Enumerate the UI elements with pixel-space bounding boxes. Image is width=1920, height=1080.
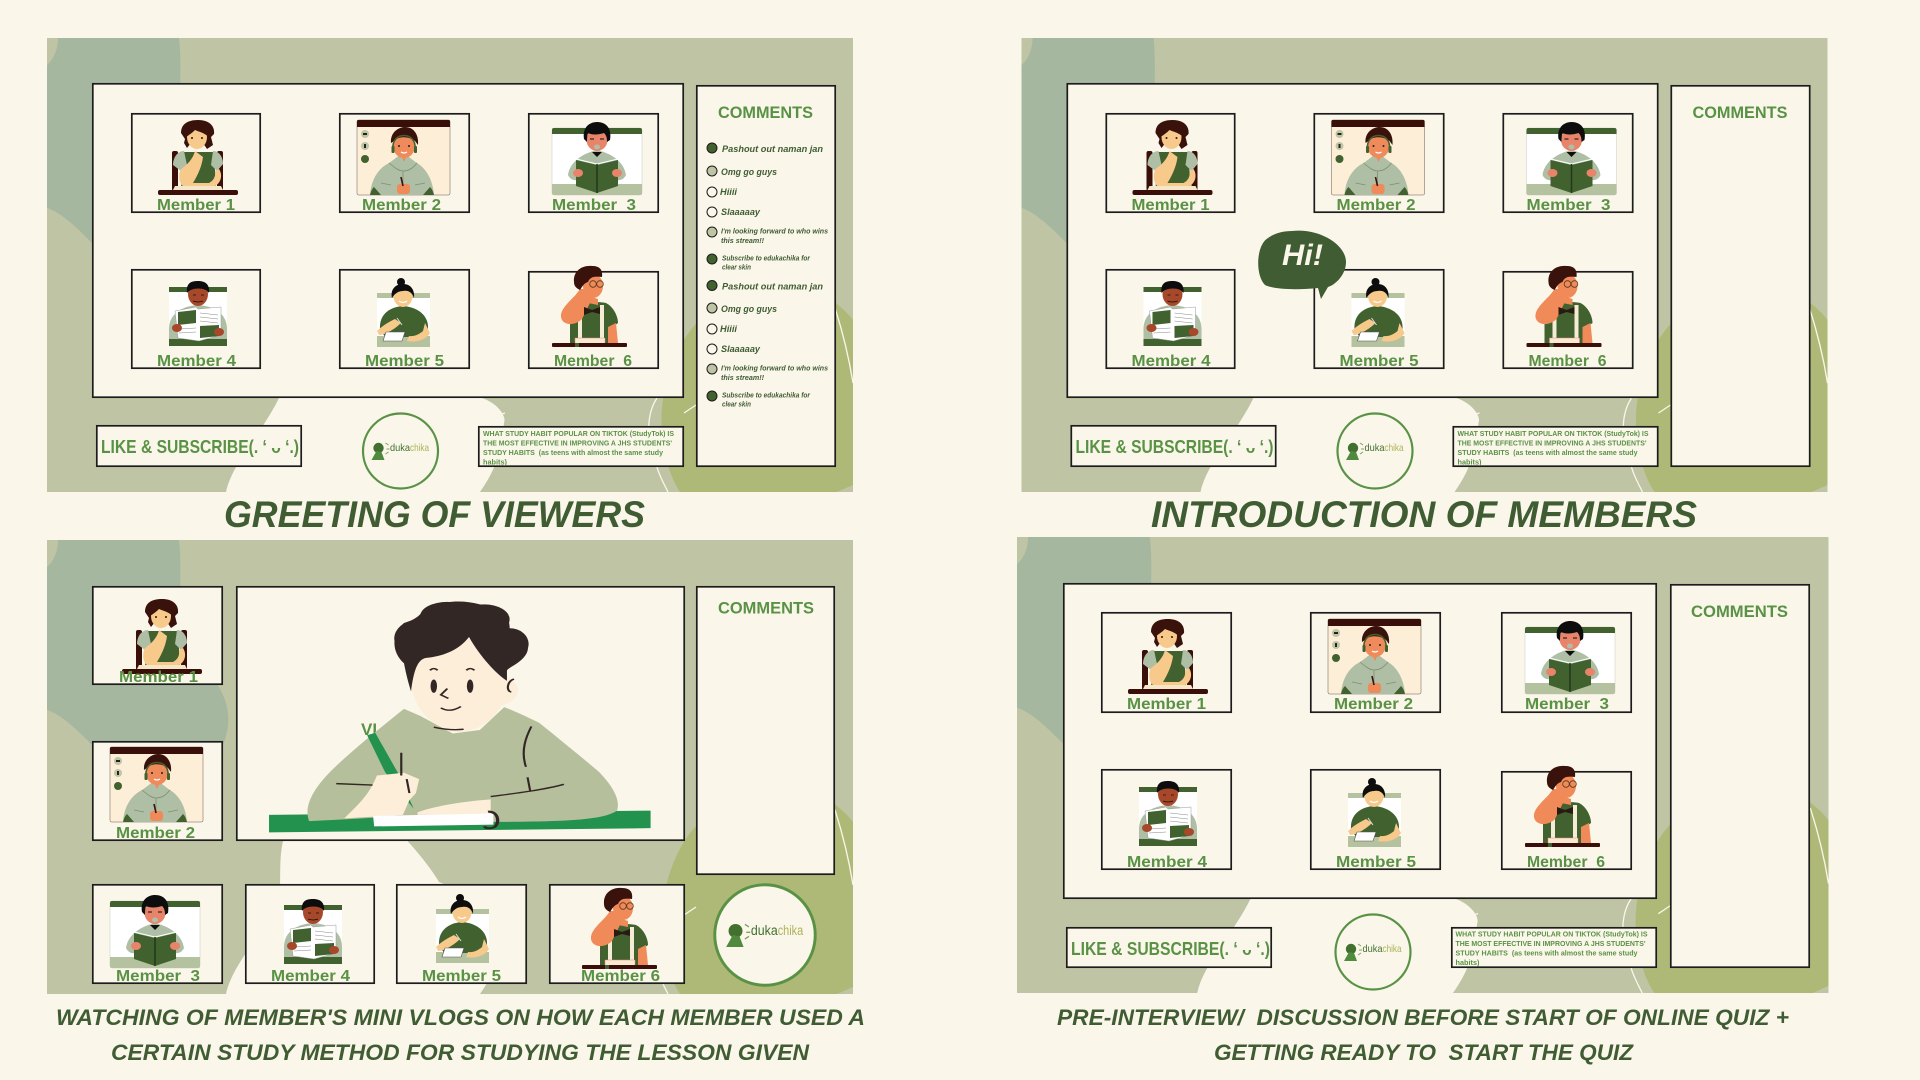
member 2 tile: Member 2 [362, 197, 441, 214]
question box: STUDY HABITS (as teens with almost the same study [1458, 448, 1638, 457]
member 4 tile: Member 4 [1127, 854, 1207, 871]
comments panel: I'm looking forward to who wins [721, 226, 828, 236]
question box: STUDY HABITS (as teens with almost the same study [483, 448, 664, 457]
question box [479, 427, 683, 466]
member 6 tile: Member 6 [1527, 854, 1605, 871]
panel: greeting of viewers [47, 38, 853, 535]
logo [1336, 914, 1410, 990]
comments panel [1671, 585, 1809, 967]
like and subscribe box: LIKE & SUBSCRIBE(. ‘ ᴗ ‘.) [1071, 939, 1270, 959]
member 2 tile [340, 114, 469, 214]
member 4 tile: Member 4 [271, 968, 350, 985]
member 6 tile [1503, 266, 1633, 370]
heading: PRE-INTERVIEW/ DISCUSSION BEFORE START OF ONLINE QUIZ + [1057, 1005, 1789, 1030]
heading: WATCHING OF MEMBER'S MINI VLOGS ON HOW EACH MEMBER USED A [56, 1005, 865, 1030]
member 5 tile [397, 885, 526, 985]
heading [1057, 1005, 1789, 1065]
speech bubble: Hi [1258, 231, 1346, 299]
member 2 tile: Member 2 [116, 825, 195, 842]
comments panel: Subscribe to edukachika for [722, 254, 811, 262]
comments panel: Slaaaaay [721, 344, 761, 355]
comments panel: clear skin [722, 262, 752, 272]
member 4 tile: Member 4 [1132, 353, 1211, 370]
comments panel: clear skin [722, 400, 752, 408]
heading: GREETING OF VIEWERS [224, 494, 645, 535]
member 3 tile [1503, 114, 1633, 214]
member 5 tile: Member 5 [1340, 353, 1419, 370]
member 5 tile: Member 5 [365, 353, 444, 370]
question box: WHAT STUDY HABIT POPULAR ON TIKTOK (StudyTok) IS [1456, 930, 1648, 938]
member 3 tile: Member 3 [1526, 197, 1611, 214]
member 3 tile [1502, 613, 1631, 713]
like and subscribe box: LIKE & SUBSCRIBE(. ‘ ᴗ ‘.) [1076, 437, 1274, 457]
speech bubble: Hi: Hi! [1282, 239, 1323, 272]
comments panel: COMMENTS [1692, 104, 1788, 122]
panel backdrop [1022, 38, 1828, 492]
member 2 tile [1314, 114, 1444, 214]
member 3 tile: Member 3 [116, 968, 200, 985]
question box: habits) [1456, 958, 1480, 967]
question box: STUDY HABITS (as teens with almost the same study [1456, 948, 1638, 958]
logo [363, 414, 438, 488]
member 1 tile: Member 1 [1127, 696, 1206, 713]
student illustration [269, 602, 651, 832]
panel: introduction of members [1022, 38, 1828, 535]
comments panel: this stream!! [721, 373, 765, 382]
comments panel: this stream!! [721, 236, 765, 245]
heading: CERTAIN STUDY METHOD FOR STUDYING THE LESSON GIVEN [111, 1040, 810, 1065]
like and subscribe box [1071, 426, 1276, 466]
member 3 tile: Member 3 [552, 197, 636, 214]
question box: THE MOST EFFECTIVE IN IMPROVING A JHS STUDENTS' [1458, 438, 1647, 448]
member 2 tile: Member 2 [1334, 696, 1413, 713]
member 6 tile: Member 6 [1528, 353, 1607, 370]
member 5 tile [1311, 770, 1440, 871]
question box: WHAT STUDY HABIT POPULAR ON TIKTOK (StudyTok) IS [483, 429, 674, 438]
comments panel: COMMENTS [718, 104, 813, 122]
member 6 tile [1502, 766, 1631, 871]
panel backdrop [47, 540, 853, 994]
member 4 tile [246, 885, 374, 985]
panel: watching mini vlogs [47, 540, 865, 1065]
question box: WHAT STUDY HABIT POPULAR ON TIKTOK (StudyTok) IS [1458, 429, 1648, 438]
member 5 tile: Member 5 [422, 968, 501, 985]
comments panel: Omg go guys [721, 304, 777, 315]
question box: THE MOST EFFECTIVE IN IMPROVING A JHS STUDENTS' [483, 438, 672, 448]
comments panel: Subscribe to edukachika for [722, 390, 811, 400]
member 3 tile: Member 3 [1525, 696, 1609, 713]
member 5 tile: Member 5 [1336, 854, 1416, 871]
comments panel: Slaaaaay [721, 207, 761, 218]
comments panel: Pashout out naman jan [722, 282, 823, 292]
member 4 tile [1102, 770, 1231, 871]
member 4 tile [132, 270, 260, 370]
question box: habits) [483, 458, 507, 466]
question box [1453, 427, 1658, 466]
heading [56, 1005, 865, 1065]
panel backdrop [1017, 537, 1828, 993]
member 5 tile [340, 270, 469, 370]
comments panel: I'm looking forward to who wins [721, 364, 828, 372]
member 1 tile: Member 1 [119, 669, 198, 686]
like and subscribe box [1067, 928, 1271, 967]
video window with writing student [237, 587, 684, 840]
panel backdrop [47, 38, 853, 492]
logo [715, 885, 815, 985]
member 1 tile: Member 1 [1132, 197, 1210, 214]
logo [1338, 414, 1412, 488]
like and subscribe box [97, 426, 301, 466]
like and subscribe box: LIKE & SUBSCRIBE(. ‘ ᴗ ‘.) [101, 437, 299, 457]
member 4 tile [1106, 270, 1235, 370]
member 2 tile: Member 2 [1336, 197, 1416, 214]
comments panel [697, 587, 834, 874]
member 4 tile: Member 4 [157, 353, 236, 370]
member 1 tile [93, 587, 222, 686]
member 6 tile: Member 6 [554, 353, 632, 370]
member 3 tile [529, 114, 658, 214]
partly hidden video caption: VI [361, 720, 377, 739]
comments panel: COMMENTS [718, 600, 814, 618]
main stage box [1067, 84, 1658, 397]
main stage box [93, 84, 683, 397]
comments panel: Pashout out naman jan [722, 144, 823, 155]
member 5 tile [1314, 270, 1444, 370]
question box: habits) [1458, 458, 1482, 466]
member 6 tile [550, 885, 684, 985]
main stage box [1064, 584, 1656, 898]
member 1 tile [1106, 114, 1235, 214]
comments panel: Hiiii [720, 187, 737, 198]
member 1 tile [132, 114, 260, 214]
comments panel [1671, 86, 1810, 466]
member 6 tile [529, 266, 658, 370]
question box [1452, 928, 1656, 967]
question box: THE MOST EFFECTIVE IN IMPROVING A JHS STUDENTS' [1456, 939, 1646, 948]
member 2 tile [93, 742, 222, 842]
comments panel: Omg go guys [721, 167, 777, 178]
member 6 tile: Member 6 [581, 968, 660, 985]
heading: INTRODUCTION OF MEMBERS [1151, 494, 1697, 535]
member 1 tile [1102, 613, 1231, 713]
member 1 tile: Member 1 [157, 197, 235, 214]
heading: GETTING READY TO START THE QUIZ [1214, 1040, 1634, 1065]
member 3 tile [93, 885, 222, 985]
comments panel [697, 86, 835, 466]
comments panel: COMMENTS [1691, 603, 1788, 621]
member 2 tile [1311, 613, 1440, 713]
comments panel: Hiiii [720, 324, 737, 335]
panel: pre-interview discussion [1017, 537, 1828, 1065]
